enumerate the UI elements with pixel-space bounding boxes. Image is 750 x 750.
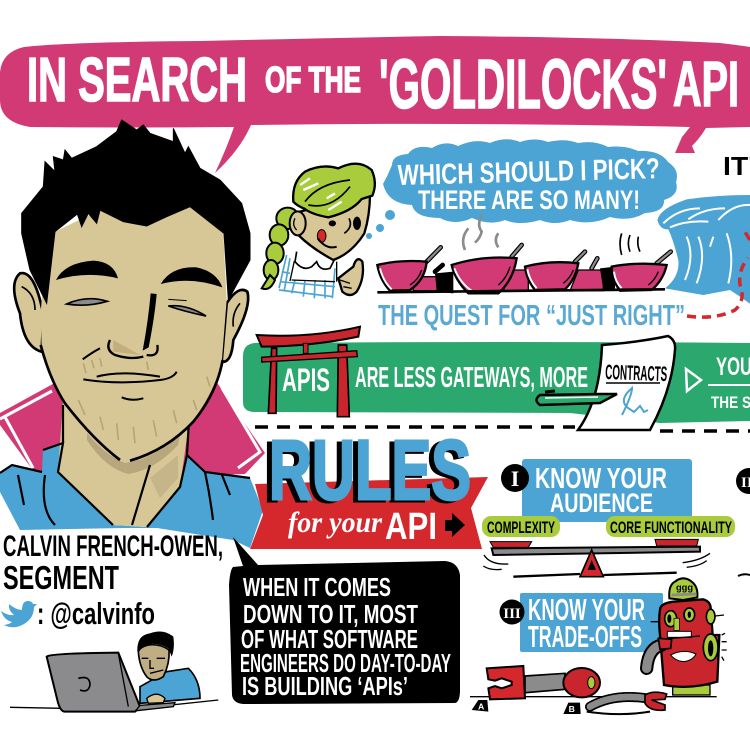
robot eyes <box>665 611 677 627</box>
face and hair <box>14 120 250 461</box>
pen <box>536 391 617 405</box>
partial badge II <box>736 468 750 494</box>
twitter handle: : @calvinfo <box>37 596 155 631</box>
hair <box>293 164 375 217</box>
cloud text: THERE ARE SO MANY! <box>418 185 640 215</box>
steam <box>463 215 498 250</box>
stubble <box>78 358 210 443</box>
portrait of Calvin <box>0 400 263 548</box>
robot side parts <box>703 634 718 661</box>
banner speech shape <box>0 36 750 173</box>
title banner <box>0 36 750 173</box>
quote text: DOWN TO IT, MOST <box>243 599 418 629</box>
rules banner: API <box>385 506 437 548</box>
band arrow and text <box>686 353 750 412</box>
neck <box>58 400 190 527</box>
person body <box>140 668 200 703</box>
robot mouth <box>667 631 691 637</box>
part A: claw and ball <box>470 666 717 699</box>
thought cloud <box>366 139 677 239</box>
cloud text: WHICH SHOULD I PICK? <box>397 153 660 192</box>
table line <box>10 700 218 708</box>
rule 1 panel <box>482 459 735 537</box>
quote text: WHEN IT COMES <box>243 572 391 602</box>
rule 3 panel <box>500 592 663 654</box>
person head <box>138 645 169 680</box>
small figure at laptop <box>10 631 218 712</box>
Goldilocks girl <box>262 164 375 300</box>
contract paper: CONTRACTS <box>605 361 668 386</box>
speaker name <box>3 530 223 596</box>
quote text: OF WHAT SOFTWARE <box>241 624 418 654</box>
robot <box>647 578 727 695</box>
face <box>298 193 370 260</box>
quote text: IS BUILDING ‘APIs’ <box>242 671 408 701</box>
balance scale <box>483 539 710 577</box>
red ribbon <box>250 477 488 549</box>
row of pans <box>377 215 671 293</box>
quote text <box>240 572 451 701</box>
tag B <box>563 703 581 714</box>
tag A: A <box>478 701 485 711</box>
robot feet <box>673 685 710 695</box>
shirt <box>0 443 263 548</box>
wave <box>657 195 750 305</box>
badge I <box>501 464 529 492</box>
panel heading: KNOW YOUR <box>528 592 645 627</box>
badge III: III <box>503 606 521 622</box>
laptop <box>47 653 140 712</box>
APIS label: APIS <box>282 362 330 398</box>
hair <box>22 120 250 303</box>
features <box>353 217 361 230</box>
pink diamond behind portrait <box>0 318 265 480</box>
floor parts A and B <box>470 666 717 714</box>
robot arm <box>647 645 662 668</box>
braid <box>262 208 299 289</box>
RULES heading: RULES <box>269 423 471 517</box>
pan handles <box>427 245 671 272</box>
green band <box>243 342 750 423</box>
title text: IN SEARCH <box>27 46 247 115</box>
rules banner <box>250 423 488 549</box>
black quote bubble <box>229 537 460 704</box>
cloud text <box>397 153 660 215</box>
icon: twitter bird <box>1 601 37 627</box>
part B: fallen arm <box>587 692 667 714</box>
ears <box>14 273 43 352</box>
shelf line <box>377 289 665 292</box>
robot cap <box>669 578 697 600</box>
speaker name: CALVIN FRENCH-OWEN, <box>3 530 223 563</box>
title text: OF THE <box>265 59 361 100</box>
complexity pill: COMPLEXITY <box>487 518 555 537</box>
back pans <box>413 270 603 291</box>
badge I: I <box>511 466 519 491</box>
robot body <box>659 599 719 687</box>
RULES heading: RULES <box>264 425 466 519</box>
quote text: ENGINEERS DO DAY-TO-DAY <box>240 648 451 678</box>
tag B: B <box>569 704 575 714</box>
collar lines <box>0 405 250 527</box>
foam stripes <box>663 205 750 283</box>
contract paper <box>578 336 675 430</box>
thought bubbles <box>366 210 395 239</box>
checked dress <box>278 255 338 300</box>
torii gate <box>257 327 360 417</box>
arrow <box>445 513 465 537</box>
tag A <box>472 700 488 712</box>
complexity pill <box>482 516 560 537</box>
panel heading: KNOW YOUR <box>535 463 667 495</box>
front pans <box>377 257 667 293</box>
rule 1 panel: AUDIENCE <box>550 488 653 518</box>
ribbon text: for your <box>288 506 382 539</box>
mouth <box>83 348 177 400</box>
signature <box>622 388 648 415</box>
eyes <box>67 299 107 305</box>
title text <box>27 45 739 123</box>
speaker name: SEGMENT <box>3 559 119 596</box>
face <box>41 207 227 460</box>
hand <box>338 259 363 295</box>
rule 3 panel: TRADE-OFFS <box>528 619 642 654</box>
eyebrows <box>56 261 118 280</box>
badge III <box>500 600 524 624</box>
laptop base and hand <box>135 703 175 712</box>
red dashed path <box>687 232 750 317</box>
nose <box>143 293 157 351</box>
robot: ggg <box>676 583 693 593</box>
